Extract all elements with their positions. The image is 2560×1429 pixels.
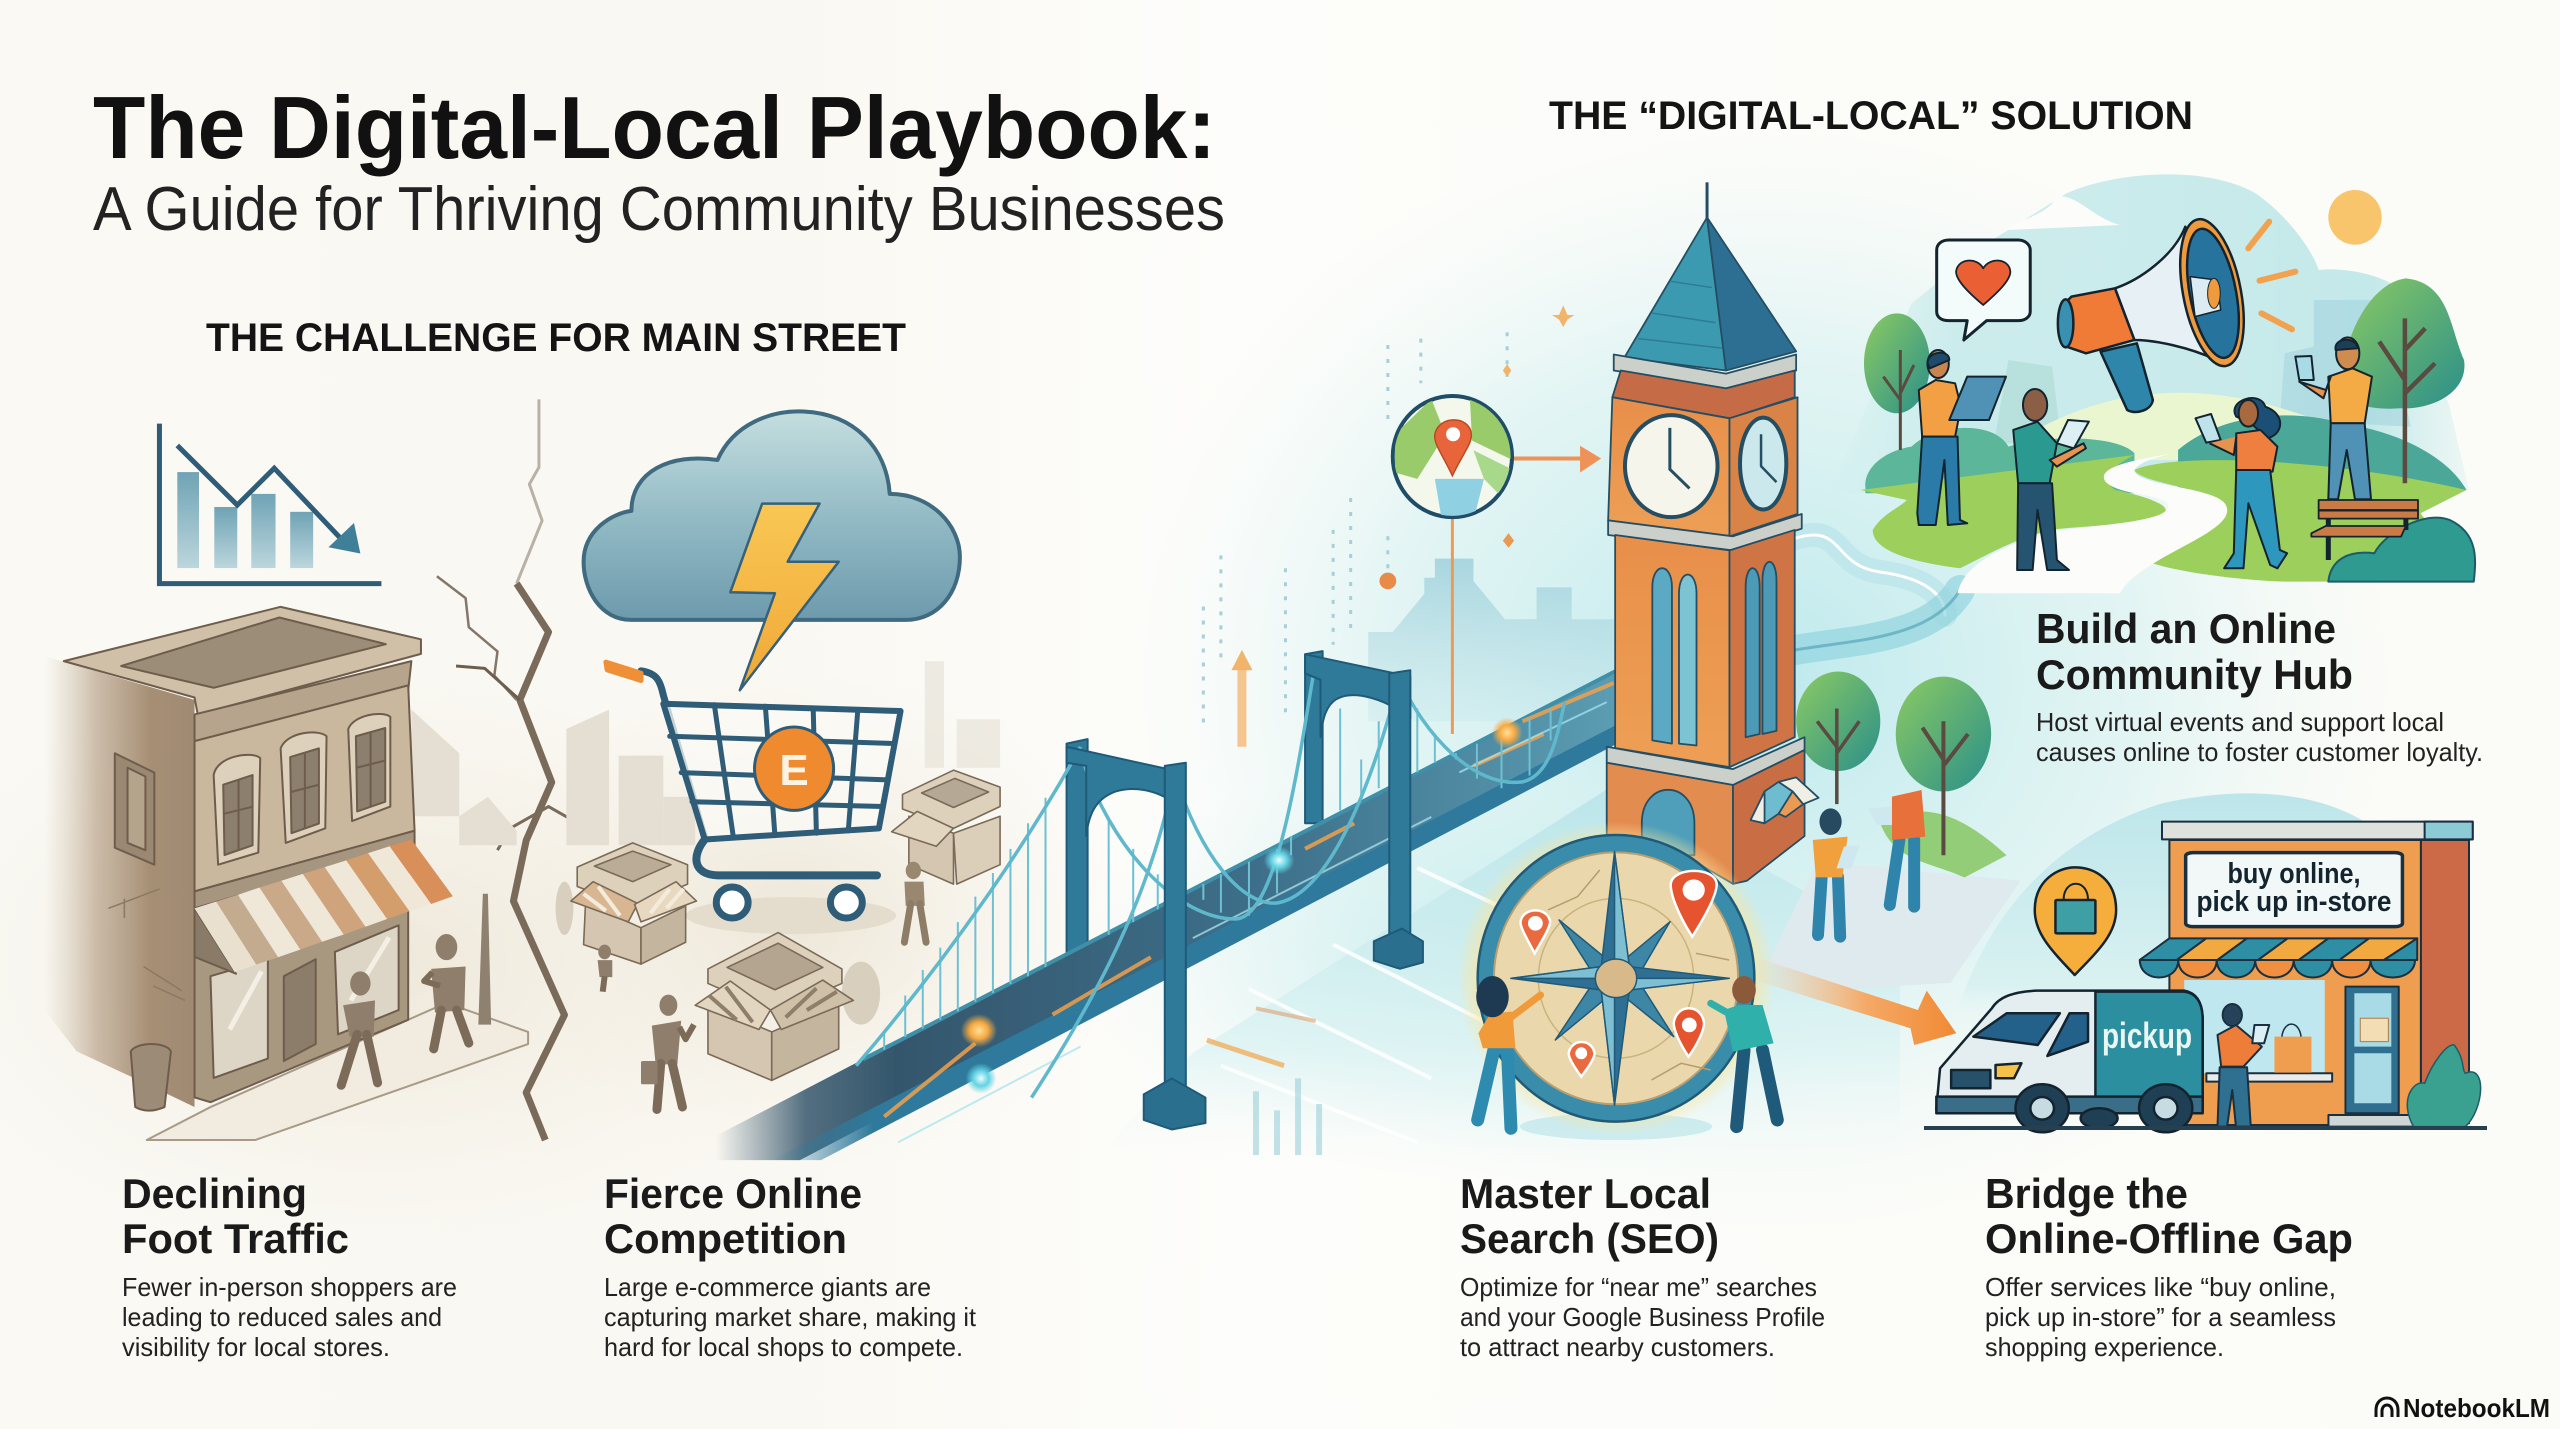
text: bridge the online-offline gap: Bridge the [1985, 1170, 2188, 1217]
sign text: buy online, [2228, 858, 2360, 890]
left wall [45, 656, 195, 1107]
back tower [1067, 651, 1323, 957]
text: build an online community hub: Build an Online [2036, 605, 2336, 652]
person walking [2196, 398, 2287, 568]
plant [2407, 1045, 2481, 1127]
illustration: compass with map pins [1457, 822, 1777, 1140]
illustration: small shops and shoppers [556, 770, 1000, 1109]
bench [2311, 500, 2418, 560]
illustration: crack dividing the street [437, 399, 574, 1140]
person with tablet [1813, 808, 1860, 937]
sidewalk [147, 1003, 528, 1140]
text: bridge the online-offline gap: shopping experience. [1985, 1332, 2224, 1362]
sign text [2196, 858, 2392, 918]
base [1607, 763, 1733, 884]
shop band [195, 831, 415, 908]
spire [1624, 217, 1726, 370]
illustration: clock tower [1607, 182, 1819, 884]
trash can [131, 1044, 171, 1111]
person on bench [2295, 337, 2372, 499]
window [2184, 980, 2325, 1073]
sky [1829, 174, 2469, 493]
shop back right [892, 770, 1000, 884]
text: declining foot traffic: Fewer in-person shoppers are [122, 1272, 457, 1302]
text: fierce online competition: Competition [604, 1215, 847, 1262]
illustration: ground below the bridge [1095, 785, 1900, 1160]
text: fierce online competition: Fierce Online [604, 1170, 862, 1217]
text: bridge the online-offline gap [1985, 1170, 2353, 1362]
illustration: location bag pin [2035, 867, 2116, 975]
pedestrian 2 [424, 934, 469, 1049]
bushes [2328, 518, 2475, 582]
ground line [1924, 1126, 2487, 1130]
heading: the solution: THE “DIGITAL-LOCAL” SOLUTION [1549, 94, 2193, 138]
text: bridge the online-offline gap: pick up in-store” for a seamless [1985, 1302, 2336, 1332]
window three [348, 714, 390, 821]
person left [1476, 976, 1541, 1128]
lawn [1861, 455, 2166, 568]
person from behind [2013, 389, 2089, 570]
map pins [1521, 871, 1717, 1077]
title: A Guide for Thriving Community Businesses [93, 175, 1225, 244]
roof [64, 607, 421, 714]
shopper right [904, 862, 926, 942]
text: fierce online competition: capturing market share, making it [604, 1302, 977, 1332]
text: bridge the online-offline gap: Offer services like “buy online, [1985, 1272, 2336, 1302]
light nodes [961, 717, 1523, 1094]
awning [2140, 938, 2206, 960]
striped awning [1751, 777, 1819, 823]
lamp post [478, 894, 491, 1025]
heart speech bubble [1937, 240, 2030, 340]
sun [2328, 190, 2382, 245]
arrow: compass to pickup [1759, 958, 1956, 1045]
sky [1951, 793, 2362, 1033]
shop customer [2217, 1004, 2269, 1127]
shopper center [641, 995, 694, 1109]
text: master local search: Search (SEO) [1460, 1215, 1719, 1262]
person right [1711, 976, 1777, 1127]
text: fierce online competition [604, 1170, 977, 1362]
door [2345, 987, 2399, 1113]
text: build an online community hub: causes online to foster customer loyalty. [2036, 737, 2483, 767]
cables [856, 661, 1565, 1098]
icon: declining chart [159, 424, 381, 584]
illustration: townspeople near tower [1813, 790, 1925, 937]
title: The Digital-Local Playbook: [93, 78, 1216, 177]
text: declining foot traffic: leading to reduced sales and [122, 1302, 442, 1332]
winding path [1958, 453, 2227, 593]
illustration: pickup van [1936, 991, 2203, 1132]
portals and front towers [1067, 654, 1423, 1129]
left tree [1864, 313, 1930, 413]
text: master local search [1460, 1170, 1825, 1362]
text: declining foot traffic: Declining [122, 1170, 307, 1217]
upper facade [195, 685, 415, 891]
right tree [2342, 278, 2464, 409]
heading: the challenge: THE CHALLENGE FOR MAIN STREET [206, 316, 906, 360]
road deck [716, 670, 1617, 1160]
shopper small [598, 945, 612, 992]
text: build an online community hub: Community Hub [2036, 651, 2353, 698]
person standing [1868, 790, 1925, 907]
title [93, 78, 1225, 244]
megaphone sound rays [2248, 222, 2295, 329]
window two [281, 732, 327, 843]
text: declining foot traffic: Foot Traffic [122, 1215, 349, 1262]
clock room [1612, 370, 1795, 418]
illustration: storm cloud with lightning [584, 411, 960, 690]
illustration: main street building [45, 607, 528, 1140]
illustration: shopping cart [606, 662, 901, 934]
text: master local search: to attract nearby customers. [1460, 1332, 1775, 1362]
illustration: distant digital skyline and data streams [1203, 305, 1614, 747]
clock faces [1625, 415, 1718, 517]
text: master local search: and your Google Business Profile [1460, 1302, 1825, 1332]
window one [214, 755, 260, 865]
sign text: pick up in-store [2196, 886, 2392, 918]
text: master local search: Optimize for “near me” searches [1460, 1272, 1817, 1302]
text: master local search: Master Local [1460, 1170, 1711, 1217]
illustration: park and community scene [1829, 174, 2475, 593]
storefront body [2169, 840, 2421, 1125]
shop front left [571, 843, 696, 964]
text: build an online community hub [2036, 605, 2483, 767]
text: fierce online competition: Large e-commerce giants are [604, 1272, 931, 1302]
illustration: suspension bridge [716, 651, 1617, 1160]
step [2328, 1115, 2414, 1127]
icon letter: E on cart: E [779, 746, 809, 795]
illustration: faded skyline [411, 661, 1000, 845]
pedestrian 1 [341, 971, 378, 1085]
van label: pickup [2102, 1015, 2192, 1056]
illustration: trees and plaza near tower [1768, 672, 2021, 989]
illustration: storefront with sign [1951, 793, 2481, 1127]
text: declining foot traffic [122, 1170, 457, 1362]
text: declining foot traffic: visibility for local stores. [122, 1332, 390, 1362]
hangers [884, 709, 1551, 1050]
awning [195, 908, 236, 974]
notebooklm logo: NotebookLM [2403, 1393, 2550, 1423]
illustration: map pin badge and arrow [1393, 396, 1601, 734]
shaft [1615, 535, 1729, 767]
shop front middle [695, 933, 853, 1080]
shopfront [195, 845, 408, 1102]
text: build an online community hub: Host virtual events and support local [2036, 707, 2444, 737]
compass star [1511, 852, 1729, 1105]
megaphone [2058, 217, 2254, 412]
text: fierce online competition: hard for local shops to compete. [604, 1332, 963, 1362]
person with tablet [1917, 350, 2006, 525]
hills [1865, 428, 2134, 493]
text: bridge the online-offline gap: Online-Offline Gap [1985, 1215, 2353, 1262]
illustration: winding road to the park [1790, 535, 1960, 650]
